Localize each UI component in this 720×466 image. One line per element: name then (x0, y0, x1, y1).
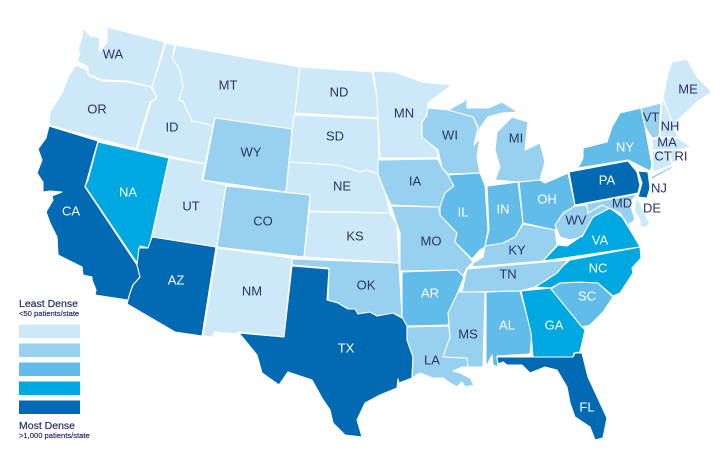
label: AL: AL (499, 318, 515, 332)
state: Wisconsin (422, 108, 480, 174)
state: Washington (77, 27, 165, 87)
label: OH: OH (537, 192, 557, 206)
state: Illinois (440, 173, 488, 259)
legend swatch 3 (19, 362, 80, 376)
state: Massachusetts (652, 138, 692, 150)
state: West Virginia (555, 205, 610, 240)
label: KY: KY (508, 242, 526, 258)
label: SC: SC (578, 288, 596, 304)
label: SD: SD (326, 128, 344, 144)
state: New Mexico (203, 248, 292, 337)
label: GA: GA (545, 318, 564, 332)
label: UT: UT (182, 198, 200, 214)
state: New Jersey (638, 171, 650, 198)
state: Minnesota (373, 71, 452, 158)
label: MA: MA (657, 134, 677, 150)
state: Mississippi (443, 292, 485, 367)
legend heading: least dense: Least Dense (19, 298, 78, 310)
label: KS: KS (346, 228, 364, 244)
legend swatch 4 (19, 382, 80, 395)
state: Indiana (485, 182, 523, 246)
legend swatch 2 (19, 344, 80, 357)
state: Maryland (575, 194, 637, 225)
state: Kansas (304, 212, 399, 263)
state: Georgia (521, 288, 585, 357)
legend swatch 1 (19, 324, 80, 338)
state: Arkansas (402, 270, 464, 326)
state: Colorado (217, 186, 310, 257)
label: CA: CA (62, 204, 80, 218)
label: TX: TX (338, 340, 355, 356)
label: WY: WY (241, 144, 262, 160)
label: NM: NM (242, 284, 262, 298)
state: Utah (152, 158, 226, 247)
state: Missouri (391, 206, 473, 276)
state: Nevada (85, 142, 169, 263)
state: Pennsylvania (569, 161, 640, 205)
label: WA: WA (103, 46, 124, 62)
state: Tennessee (462, 260, 568, 292)
label: MS: MS (458, 326, 478, 342)
state: New York (578, 108, 652, 171)
label: TN: TN (499, 266, 517, 282)
label: NE: NE (333, 178, 351, 194)
label: CT: CT (654, 148, 672, 164)
label: MD: MD (612, 196, 632, 210)
state: Rhode Island (669, 149, 677, 164)
state: Oregon (49, 65, 157, 149)
label: CO: CO (253, 214, 273, 228)
state: Delaware (634, 197, 650, 227)
state: South Dakota (289, 115, 379, 174)
label: NC: NC (589, 260, 607, 276)
state: North Carolina (535, 247, 641, 296)
label: VA: VA (592, 232, 609, 248)
state: Nebraska (286, 162, 390, 213)
label: IN: IN (496, 202, 510, 216)
label: IL: IL (458, 204, 468, 220)
legend note: over 1000: >1,000 patients/state (19, 431, 90, 440)
label: VT: VT (643, 110, 659, 124)
label: WI: WI (442, 128, 458, 142)
state: Florida (497, 353, 607, 440)
label: AZ: AZ (168, 272, 184, 288)
state: Montana (172, 45, 300, 129)
state: Michigan upper peninsula (448, 93, 518, 142)
state: Iowa (378, 159, 454, 207)
state: Texas (239, 266, 413, 437)
label: DE: DE (643, 200, 661, 216)
state: California (37, 126, 140, 300)
state: Arizona (127, 237, 216, 336)
label: NY: NY (616, 140, 634, 154)
label: ME: ME (678, 82, 698, 96)
label: OK: OK (357, 278, 376, 292)
state: Connecticut (652, 150, 672, 172)
label: WV: WV (566, 212, 587, 228)
state: Michigan lower peninsula (495, 117, 545, 182)
legend swatch 5 (19, 400, 80, 414)
label: OR: OR (87, 102, 107, 116)
state: Idaho (137, 43, 213, 164)
state: South Carolina (551, 282, 613, 327)
legend note: under 50: <50 patients/state (19, 309, 79, 318)
label: FL: FL (579, 400, 595, 414)
label: MT: MT (219, 78, 237, 92)
state: New Hampshire (660, 98, 678, 137)
state: Kentucky (472, 224, 557, 267)
state: Vermont (641, 103, 661, 138)
label: ID: ID (166, 120, 178, 134)
label: PA: PA (599, 172, 616, 188)
state: Louisiana (407, 326, 474, 387)
state labels (62, 46, 698, 414)
state: Virginia (543, 208, 640, 261)
state: Maine (663, 59, 712, 135)
state: North Dakota (295, 67, 378, 118)
legend (19, 298, 90, 440)
label: MN: MN (394, 106, 414, 120)
label: ND: ND (330, 84, 348, 100)
label: RI: RI (674, 148, 688, 164)
state: Oklahoma (292, 259, 402, 317)
label: NH: NH (661, 118, 679, 134)
legend heading: most dense: Most Dense (19, 420, 75, 432)
label: MO: MO (421, 234, 441, 248)
state: Alabama (486, 291, 532, 367)
label: IA: IA (409, 174, 421, 188)
label: LA: LA (424, 352, 440, 368)
label: NJ: NJ (651, 180, 667, 196)
label: NA: NA (119, 184, 137, 200)
state: Wyoming (203, 118, 292, 192)
state: Ohio (519, 173, 575, 230)
state: Long Island (651, 166, 672, 179)
label: AR: AR (421, 286, 439, 300)
label: MI: MI (509, 130, 523, 146)
